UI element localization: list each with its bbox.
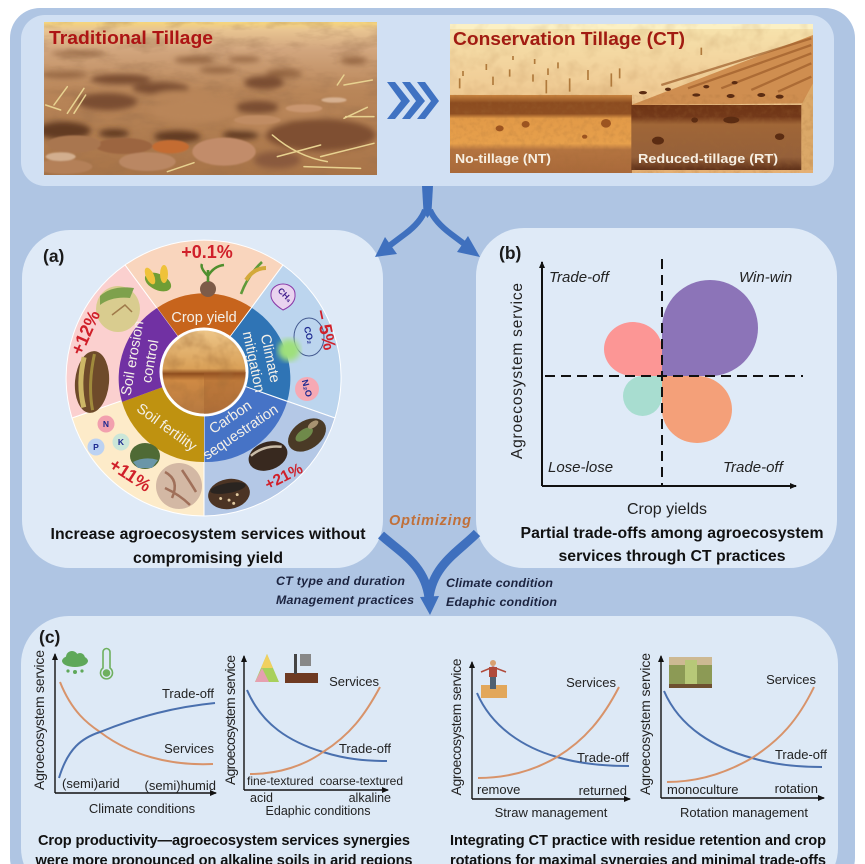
- icon: CH4 bubble: [271, 284, 295, 310]
- label: soil erosion control: Soil erosion: [119, 320, 148, 397]
- chart: edaphic conditions: Edaphic conditions: [266, 804, 370, 818]
- value: carbon sequestration: +21%: [262, 460, 306, 494]
- petal: win-win: [662, 280, 758, 376]
- label: soil fertility: Soil fertility: [133, 401, 200, 455]
- panel: a: [22, 230, 383, 568]
- arrow: split to panels a and b: [375, 186, 480, 257]
- axis label: x: Crop yields: [627, 501, 707, 518]
- image: traditional tillage field: [36, 22, 377, 175]
- icon: N2O: N₂O: [300, 378, 314, 398]
- panel letter b: (b): [499, 243, 521, 263]
- wheel chart: [66, 240, 341, 516]
- caption: panel a: Increase agroecosystem services without: [50, 526, 366, 543]
- chart: climate conditions: (semi)arid: [62, 776, 120, 791]
- value: climate mitigation: – 5%: [312, 308, 340, 352]
- chart: straw management: remove: [477, 782, 520, 797]
- chart: straw management: Trade-off: [577, 750, 629, 765]
- petal chart: [509, 259, 803, 518]
- image: conservation tillage field: [448, 24, 815, 173]
- chart: edaphic conditions: [222, 654, 403, 818]
- chart: climate conditions: Trade-off: [162, 686, 214, 701]
- axis label: y: Agroecosystem service: [509, 283, 526, 459]
- label: CT type and duration: CT type and duration: [276, 574, 405, 588]
- chart: rotation management: monoculture: [667, 782, 739, 797]
- sector: soil erosion control: [66, 265, 204, 418]
- panel letter c: (c): [39, 627, 60, 647]
- petal: trade-off lower: [662, 376, 732, 443]
- label: win-win: Win-win: [739, 269, 792, 286]
- label: optimizing: Optimizing: [389, 513, 471, 529]
- axes: [542, 262, 796, 486]
- chart: climate conditions: [31, 648, 216, 816]
- icon: farmer in straw: [481, 660, 507, 698]
- label: lose-lose: Lose-lose: [548, 459, 613, 476]
- photo: soil carbon 3: [206, 476, 252, 512]
- label: climate mitigation: mitigation: [239, 330, 267, 394]
- photo: soil profile: [72, 350, 112, 414]
- chart: rotation management: Agroecosystem service: [637, 653, 653, 795]
- icon: soil texture triangle: [255, 654, 279, 682]
- chart: climate conditions: (semi)humid: [144, 778, 216, 793]
- chart: rotation management: Services: [766, 672, 816, 687]
- photo: vegetation: [130, 443, 160, 469]
- label: carbon sequestration: Carbon: [207, 398, 255, 438]
- chart: climate conditions: Agroecosystem service: [31, 650, 47, 790]
- chart: rotation management: Rotation management: [680, 805, 808, 820]
- icon: nutrients N P K: K: [118, 437, 125, 447]
- icon: corn: [142, 265, 174, 295]
- label: climate condition: Climate condition: [446, 576, 553, 590]
- chart: straw management: Straw management: [495, 805, 608, 820]
- icon: CO2 cloud: [294, 318, 324, 356]
- panel: tillage comparison: [21, 15, 834, 186]
- chart: edaphic conditions: alkaline: [349, 791, 391, 805]
- label: management practices: Management practices: [276, 593, 414, 607]
- sector: carbon sequestration: [204, 372, 335, 516]
- icon: root crop: [200, 264, 224, 297]
- chart: edaphic conditions: coarse-textured: [320, 774, 403, 788]
- chart: edaphic conditions: Trade-off: [339, 741, 391, 756]
- label: conservation tillage: Conservation Tillage (CT): [453, 29, 685, 49]
- photo: soil carbon 2: [244, 436, 292, 476]
- chart: straw management: [448, 658, 630, 820]
- value: crop yield: +0.1%: [181, 242, 233, 262]
- icon: soil meter: [285, 654, 318, 683]
- photo: eroded slope: [96, 286, 140, 332]
- icon: CO2 cloud: CO₂: [302, 325, 316, 345]
- icon: CH4 bubble: CH₄: [276, 286, 294, 304]
- icon: thermometer: [100, 648, 112, 679]
- caption: panel b: services through CT practices: [558, 548, 786, 565]
- label: trade-off lower right: Trade-off: [723, 459, 785, 476]
- label: no-tillage: No-tillage (NT): [455, 152, 551, 166]
- sector: soil fertility: [72, 372, 204, 516]
- label: soil erosion control: control: [139, 339, 162, 384]
- icon: nutrients N P K: [88, 416, 130, 456]
- icon: rice: [241, 262, 266, 294]
- caption: panel a: compromising yield: [133, 550, 283, 567]
- label: edaphic condition: Edaphic condition: [446, 595, 557, 609]
- chart: edaphic conditions: Services: [329, 674, 379, 689]
- petal: lose-lose: [623, 376, 662, 416]
- icon: N2O: [295, 377, 319, 401]
- value: soil fertility: +11%: [106, 454, 155, 496]
- sector: crop yield: [125, 240, 283, 372]
- panel: c: [21, 616, 838, 864]
- chart: edaphic conditions: acid: [250, 791, 273, 805]
- center soil photo: [161, 329, 247, 415]
- caption: panel c right: Integrating CT practice with residue retention and crop: [450, 833, 826, 849]
- label: carbon sequestration: sequestration: [200, 402, 281, 464]
- chart: rotation management: [637, 653, 827, 820]
- chart: rotation management: rotation: [775, 781, 818, 796]
- label: reduced-tillage: Reduced-tillage (RT): [638, 152, 778, 166]
- icon: rotation field photo: [669, 657, 712, 688]
- chart: straw management: Services: [566, 675, 616, 690]
- label: crop yield: Crop yield: [171, 310, 237, 326]
- sector: climate mitigation: [204, 265, 341, 418]
- photo: soil organisms: [156, 463, 202, 509]
- caption: panel c left: Crop productivity—agroecosystem services synergies: [38, 833, 410, 849]
- chart: climate conditions: Climate conditions: [89, 801, 196, 816]
- panel: b: [476, 228, 837, 568]
- icon: triple chevron arrow: [387, 82, 439, 119]
- quadrant dividers: [545, 259, 803, 486]
- chart: straw management: Agroecosystem service: [448, 658, 464, 796]
- caption: panel b: Partial trade-offs among agroecosystem: [520, 525, 824, 542]
- icon: nutrients N P K: P: [93, 442, 99, 452]
- icon: green glow: [278, 339, 300, 361]
- chart: straw management: returned: [579, 783, 627, 798]
- photo: soil carbon 1: [282, 411, 332, 459]
- icon: nutrients N P K: N: [103, 419, 109, 429]
- chart: rotation management: Trade-off: [775, 747, 827, 762]
- panel letter a: (a): [43, 246, 64, 266]
- label: trade-off upper left: Trade-off: [549, 269, 611, 286]
- chart: edaphic conditions: Agroecosystem service: [222, 655, 238, 785]
- petal: trade-off upper: [604, 322, 662, 376]
- arrow: optimizing merge: [381, 533, 477, 615]
- icon: rain cloud: [62, 651, 88, 674]
- label: climate mitigation: Climate: [257, 333, 283, 384]
- chart: climate conditions: Services: [164, 741, 214, 756]
- value: soil erosion control: +12%: [67, 307, 104, 358]
- chart: edaphic conditions: fine-textured: [247, 774, 314, 788]
- label: traditional tillage: Traditional Tillage: [49, 28, 213, 48]
